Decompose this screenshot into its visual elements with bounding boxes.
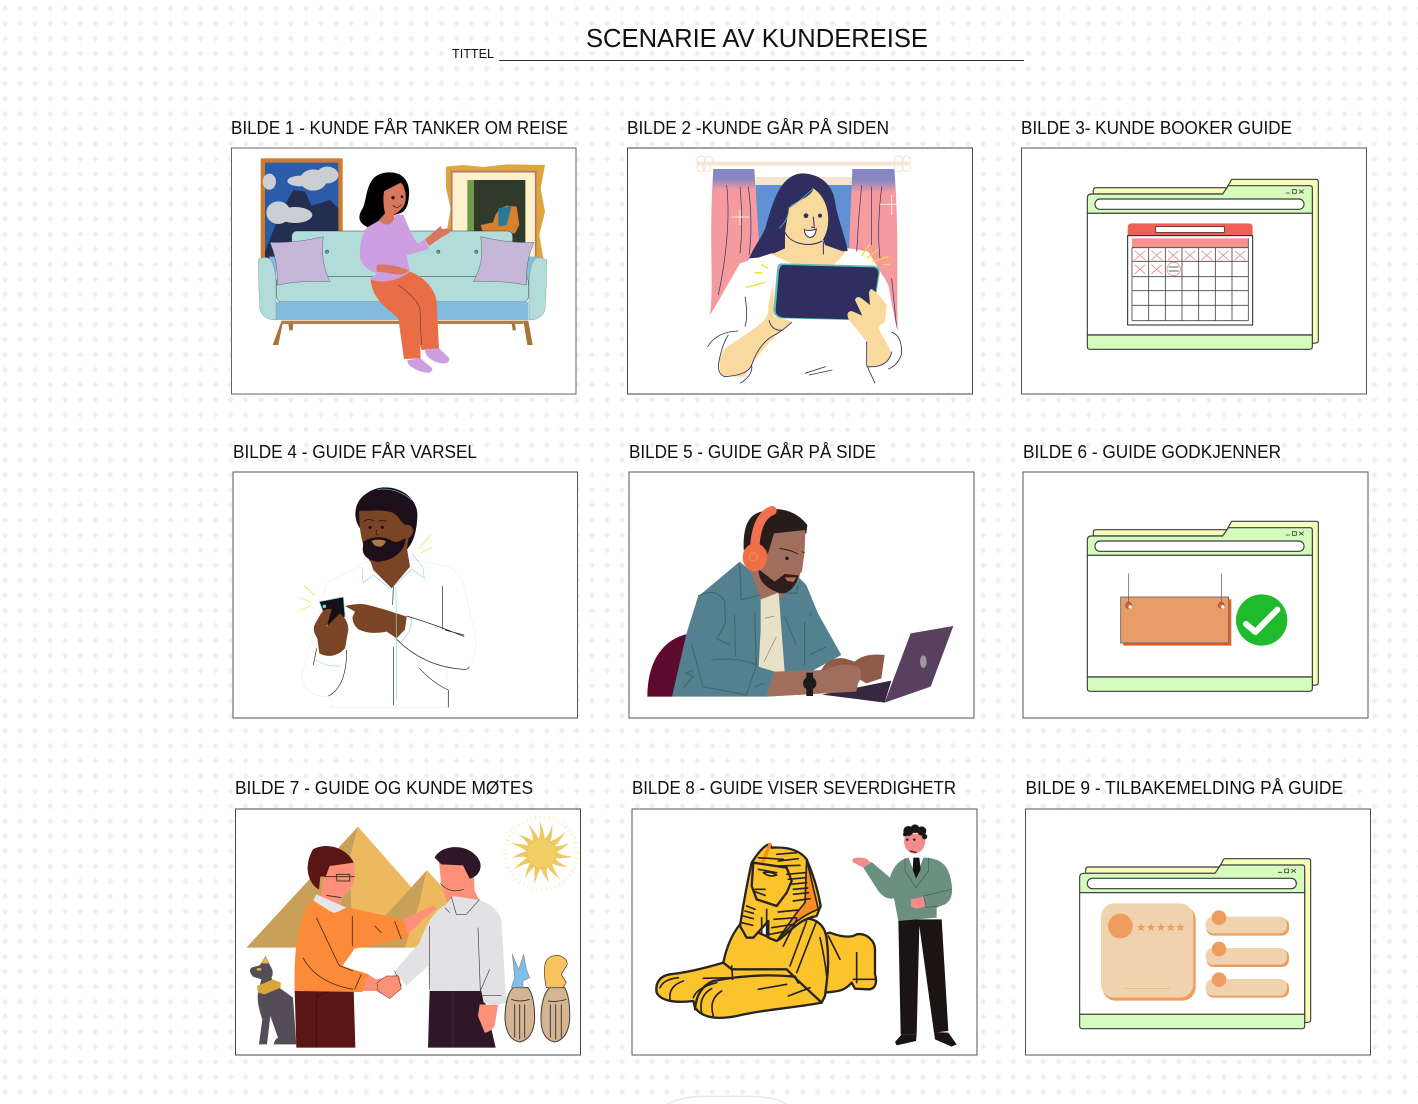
man bbox=[672, 509, 885, 697]
review rows bbox=[1206, 910, 1289, 998]
frame bbox=[1026, 809, 1370, 1055]
left man bbox=[295, 846, 436, 1048]
caption: BILDE 7 - GUIDE OG KUNDE MØTES bbox=[235, 778, 533, 798]
head bbox=[355, 487, 424, 589]
panel: bilde 4 bbox=[233, 442, 578, 718]
sofa bbox=[258, 231, 547, 345]
frame bbox=[632, 809, 977, 1055]
caption: BILDE 4 - GUIDE FÅR VARSEL bbox=[233, 442, 477, 462]
caption: BILDE 8 - GUIDE VISER SEVERDIGHETR bbox=[632, 778, 956, 798]
laptop bbox=[822, 626, 953, 703]
panel: bilde 7 bbox=[235, 778, 580, 1055]
cat bbox=[250, 956, 296, 1044]
panel: bilde 5 bbox=[629, 442, 974, 718]
calendar bbox=[1128, 223, 1253, 325]
shirt bbox=[302, 560, 476, 707]
window and curtains bbox=[697, 156, 911, 372]
caption: BILDE 2 -KUNDE GÅR PÅ SIDEN bbox=[627, 118, 889, 138]
caption: BILDE 3- KUNDE BOOKER GUIDE bbox=[1021, 118, 1292, 138]
frame bbox=[1022, 148, 1366, 394]
frame bbox=[232, 148, 576, 394]
frame bbox=[1023, 472, 1368, 718]
title block bbox=[452, 23, 1024, 61]
field label: TITTEL bbox=[452, 47, 494, 61]
right man bbox=[395, 847, 506, 1048]
phone and hands bbox=[299, 535, 469, 707]
caption: BILDE 1 - KUNDE FÅR TANKER OM REISE bbox=[231, 118, 568, 138]
panel: bilde 8 bbox=[632, 778, 977, 1055]
panel: bilde 1 bbox=[231, 118, 576, 394]
pyramids bbox=[246, 827, 455, 948]
frame bbox=[233, 472, 578, 718]
canopic jars bbox=[505, 954, 570, 1042]
panel: bilde 6 bbox=[1023, 442, 1368, 718]
caption: BILDE 9 - TILBAKEMELDING PÅ GUIDE bbox=[1026, 778, 1343, 798]
illustration: guide and customer meet bbox=[246, 817, 577, 1048]
illustration: feedback in browser bbox=[1080, 859, 1311, 1029]
caption: BILDE 5 - GUIDE GÅR PÅ SIDE bbox=[629, 442, 876, 462]
illustration: sphinx and guide bbox=[656, 824, 957, 1047]
review card bbox=[1101, 903, 1196, 1001]
sun bbox=[505, 817, 577, 889]
illustration: woman on sofa bbox=[258, 158, 547, 373]
sign bbox=[1121, 573, 1231, 646]
illustration: booking calendar in browser bbox=[1087, 179, 1318, 349]
chair bbox=[647, 634, 687, 697]
illustration: guide at laptop bbox=[647, 509, 953, 703]
panel: bilde 2 bbox=[627, 118, 972, 394]
woman bbox=[359, 172, 450, 373]
illustration: woman with tablet at window bbox=[697, 156, 911, 385]
woman bbox=[702, 173, 902, 385]
frame bbox=[629, 472, 974, 718]
caption: BILDE 6 - GUIDE GODKJENNER bbox=[1023, 442, 1281, 462]
illustration: guide with phone bbox=[299, 487, 476, 707]
icon: green check bbox=[1236, 594, 1287, 646]
panel: bilde 9 bbox=[1026, 778, 1370, 1055]
bottom rounded tab bbox=[666, 1096, 788, 1104]
frame bbox=[236, 809, 580, 1055]
frame bbox=[628, 148, 972, 394]
right painting bbox=[446, 164, 545, 258]
sphinx bbox=[656, 844, 876, 1018]
illustration: approval in browser bbox=[1087, 521, 1318, 691]
panel: bilde 3 bbox=[1021, 118, 1366, 394]
guide bbox=[852, 824, 957, 1047]
handshake bbox=[377, 976, 401, 999]
left painting bbox=[261, 158, 343, 258]
title: SCENARIE AV KUNDEREISE bbox=[586, 23, 928, 53]
